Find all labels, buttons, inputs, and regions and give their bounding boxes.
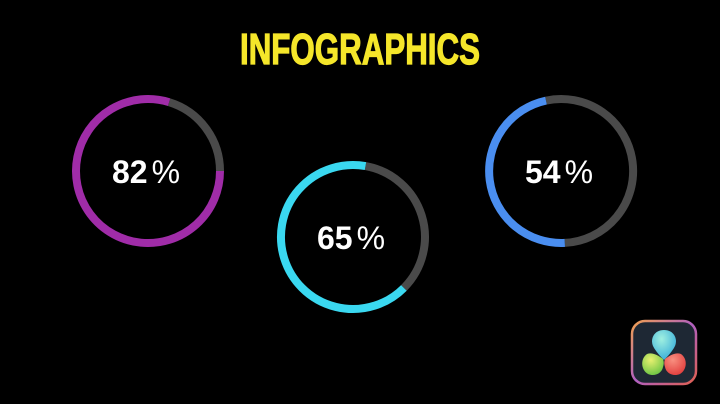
donut: 65% (281, 165, 425, 309)
title: INFOGRAPHICS (240, 25, 480, 74)
donut: 54%: 54% (525, 154, 593, 190)
donut: 82%: 82% (112, 154, 180, 190)
donut: 82% (76, 99, 220, 243)
donut: 65%: 65% (317, 220, 385, 256)
icon: DaVinci Resolve logo (632, 321, 696, 384)
donut: 54% (489, 99, 633, 243)
